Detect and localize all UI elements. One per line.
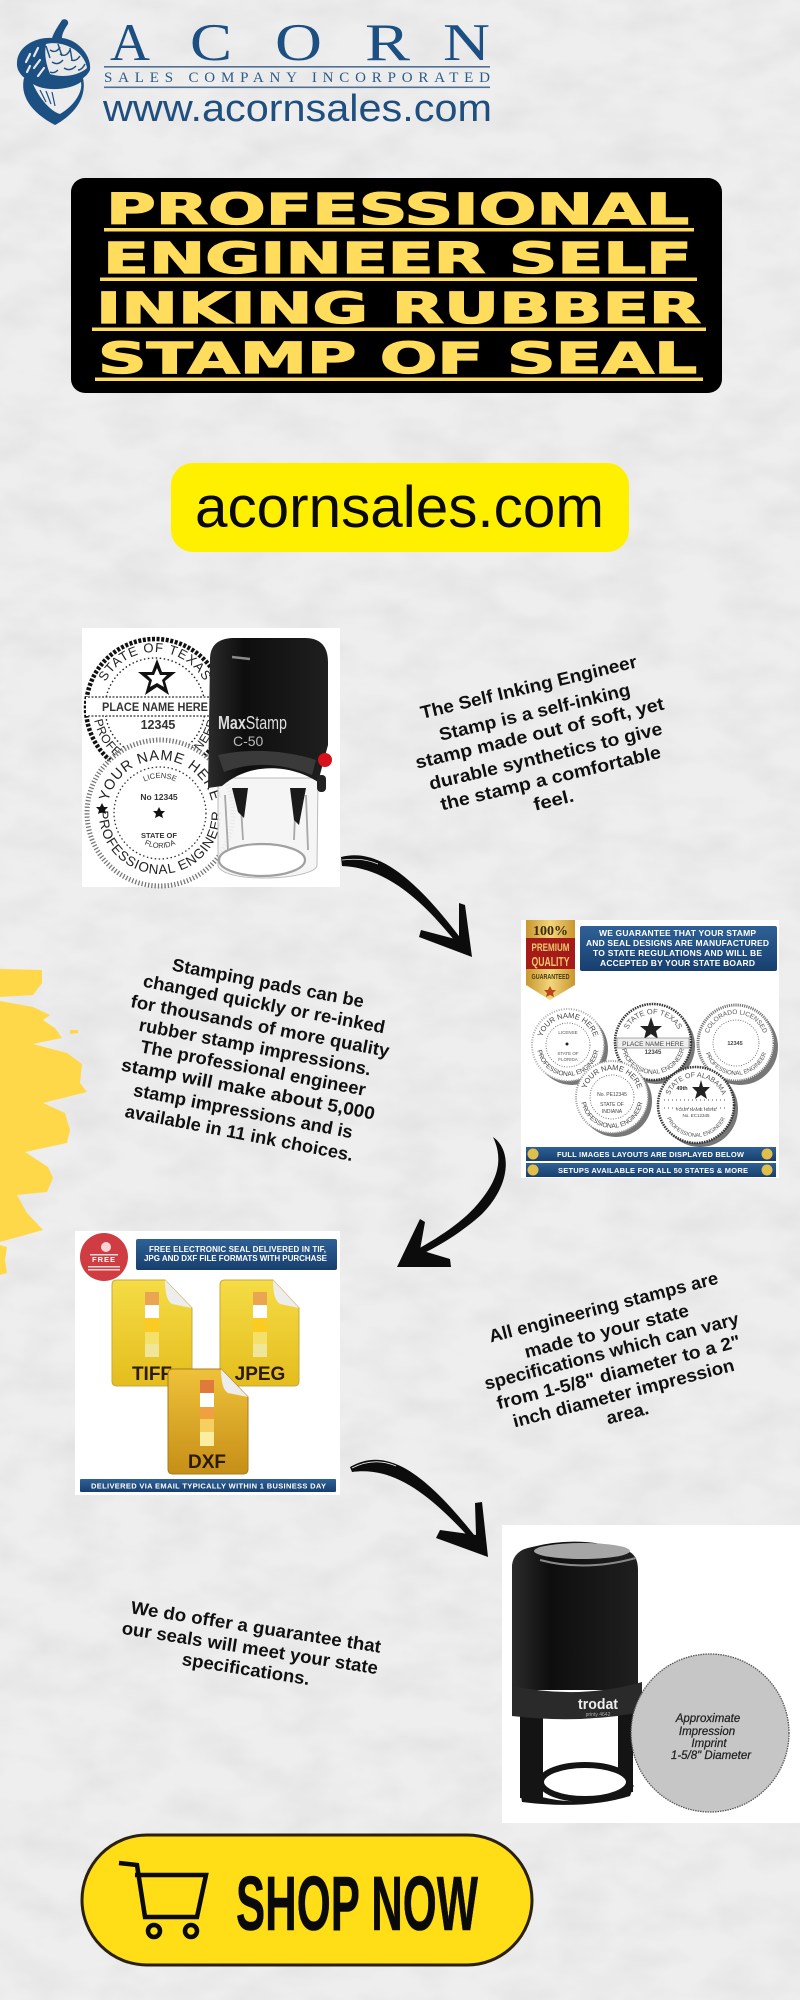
strip: delivered via email: DELIVERED VIA EMAIL TYPICALLY WITHIN 1 BUSINESS DAY <box>91 1482 326 1490</box>
text: self inking stamp description: stamp made out of soft, yet <box>413 694 666 773</box>
seal: Colorado design: PROFESSIONAL ENGINEER <box>706 1052 766 1075</box>
seal: Texas design: PROFESSIONAL ENGINEER <box>622 1048 684 1074</box>
title text <box>96 185 701 384</box>
text: self inking stamp description: the stamp a comfortable <box>438 742 663 814</box>
text: stamping pads description: rubber stamp impressions. <box>137 1015 373 1079</box>
logo url: www.acornsales.com <box>102 88 492 130</box>
image: free electronic seal files <box>75 1231 340 1495</box>
stamp: black body: C-50 <box>233 733 264 749</box>
seal: Colorado design <box>696 1004 778 1085</box>
badge: premium quality: PREMIUM <box>532 942 570 954</box>
badge: free <box>80 1233 128 1281</box>
seal: Alabama design <box>656 1066 738 1147</box>
icon: DXF file <box>168 1369 248 1474</box>
seal: Texas <box>84 636 210 762</box>
text: self inking stamp description: The Self Inking Engineer <box>418 652 639 723</box>
seal: Indiana design <box>575 1060 652 1137</box>
stamp: legs and base <box>520 1712 634 1805</box>
text: guarantee: our seals will meet your state <box>120 1618 379 1678</box>
seal: Florida: YOUR NAME HERE <box>98 750 221 800</box>
seal: Indiana design: INDIANA <box>602 1109 623 1115</box>
logo wordmark <box>110 14 490 72</box>
image: MaxStamp C-50 with seals <box>82 628 340 888</box>
strip: full images layouts: FULL IMAGES LAYOUTS ARE DISPLAYED BELOW <box>557 1150 745 1159</box>
impression circle: 1-5/8" Diameter <box>671 1750 752 1762</box>
strip: setups available: SETUPS AVAILABLE FOR ALL 50 STATES & MORE <box>558 1166 748 1175</box>
text: engineering stamp sizes <box>482 1268 743 1431</box>
button: shop now: SHOP NOW <box>236 1861 478 1947</box>
text: engineering stamp sizes: made to your state <box>522 1300 691 1362</box>
text: stamping pads description: for thousands of more quality <box>129 991 391 1061</box>
image: guarantee and seal designs <box>521 920 779 1178</box>
stamp: black body: MaxStamp <box>218 713 287 733</box>
text: stamping pads description <box>120 955 391 1165</box>
seal: Texas design <box>614 1002 695 1084</box>
badge: premium quality <box>526 920 575 1000</box>
arrow: second, pointing down-left <box>397 1137 506 1267</box>
text: stamping pads description: The professional engineer <box>139 1036 367 1100</box>
banner: free electronic seal <box>136 1239 337 1270</box>
icon: acorn <box>17 19 90 125</box>
icon: TIFF file <box>112 1280 192 1386</box>
icon: shopping cart <box>119 1863 206 1937</box>
arrow: third, pointing down-right <box>350 1460 488 1557</box>
badge: premium quality: GUARANTEED <box>532 972 570 981</box>
text: engineering stamp sizes: inch diameter impression <box>511 1355 736 1431</box>
seal: Indiana design: YOUR NAME HERE <box>582 1064 642 1089</box>
button: shop now <box>82 1835 532 1965</box>
text: engineering stamp sizes: from 1-5/8" diameter to a 2" <box>494 1331 743 1413</box>
impression circle: Impression <box>679 1726 735 1738</box>
stamp: clear base <box>218 778 318 878</box>
logo wordmark: R <box>365 14 411 72</box>
text: engineering stamp sizes: All engineering stamps are <box>487 1268 720 1346</box>
seal: Indiana design: STATE OF <box>600 1102 624 1108</box>
banner: guarantee: WE GUARANTEE THAT YOUR STAMP <box>599 928 756 938</box>
seal: Colorado design: COLORADO LICENSED <box>705 1010 767 1032</box>
stamp: body: printy 4642 <box>586 1712 611 1718</box>
seal: Florida design: YOUR NAME HERE <box>538 1012 598 1037</box>
icon: DXF file: DXF <box>188 1452 226 1473</box>
icon: TIFF file: TIFF <box>132 1364 172 1385</box>
seal: Alabama design: PROFESSIONAL ENGINEER <box>667 1116 725 1137</box>
text: self inking stamp description: durable synthetics to give <box>427 719 664 794</box>
seal: Alabama design: YOUR NAME HERE <box>675 1107 717 1112</box>
banner: guarantee: AND SEAL DESIGNS ARE MANUFACTURED <box>586 938 769 948</box>
stamp: body <box>512 1542 642 1719</box>
seal: Florida: STATE OF <box>141 831 177 840</box>
website pill: acornsales.com <box>195 475 604 540</box>
badge: free: FREE <box>92 1255 116 1264</box>
decoration: yellow brush stroke <box>0 969 87 1275</box>
text: stamping pads description: available in 11 ink choices. <box>123 1101 355 1165</box>
text: self inking stamp description: feel. <box>531 786 576 815</box>
title panel <box>71 178 722 393</box>
title text: STAMP OF SEAL <box>98 334 697 384</box>
title text: ENGINEER SELF <box>103 234 692 284</box>
seal: Texas: 12345 <box>141 718 175 732</box>
impression circle: Approximate <box>675 1713 740 1725</box>
text: engineering stamp sizes: area. <box>604 1398 651 1428</box>
text: stamping pads description: stamp will make about 5,000 <box>120 1055 377 1124</box>
badge: premium quality: 100% <box>533 924 568 939</box>
banner: guarantee: ACCEPTED BY YOUR STATE BOARD <box>600 958 755 968</box>
logo wordmark: C <box>190 14 232 72</box>
icon: JPEG file: JPEG <box>235 1364 285 1385</box>
text: guarantee: specifications. <box>181 1649 311 1689</box>
impression circle: Imprint <box>691 1738 727 1750</box>
impression circle <box>631 1654 789 1812</box>
seal: Colorado design: 12345 <box>727 1041 743 1047</box>
seal: Texas design: STATE OF TEXAS <box>624 1008 682 1029</box>
text: engineering stamp sizes: specifications which can vary <box>482 1309 741 1394</box>
logo wordmark: O <box>275 14 322 72</box>
badge: premium quality: QUALITY <box>532 954 570 969</box>
stamp: body: trodat <box>578 1696 618 1713</box>
title text: INKING RUBBER <box>96 284 701 334</box>
seal: Texas design: 12345 <box>645 1050 662 1056</box>
image: trodat stamp with impression size <box>502 1525 800 1823</box>
text: stamping pads description: changed quickly or re-inked <box>141 971 387 1037</box>
logo sub-line: SALES COMPANY INCORPORATED <box>104 70 490 86</box>
text: guarantee: We do offer a guarantee that <box>129 1597 382 1657</box>
seal: Florida: PROFESSIONAL ENGINEER <box>100 811 221 874</box>
banner: guarantee <box>580 926 777 971</box>
seal: Alabama design: 49th <box>676 1086 688 1092</box>
icon: JPEG file <box>220 1280 299 1386</box>
seal: Texas design: PLACE NAME HERE <box>622 1041 685 1048</box>
seal: Florida: LICENSE <box>143 772 177 782</box>
banner: free electronic seal: JPG AND DXF FILE FORMATS WITH PURCHASE <box>144 1254 328 1263</box>
website pill <box>171 463 629 552</box>
text: self inking stamp description: Stamp is a self-inking <box>437 680 632 745</box>
seal: Florida: No 12345 <box>140 792 178 802</box>
seal: Florida design <box>531 1008 608 1085</box>
logo: Acorn Sales Company <box>17 14 492 130</box>
strip: full images layouts <box>526 1147 776 1161</box>
seal: Florida <box>84 738 236 888</box>
arrow: first, pointing down-right <box>341 855 472 957</box>
logo wordmark: N <box>443 14 490 72</box>
text: self inking stamp description <box>413 652 666 815</box>
seal: Florida design: LICENSE <box>558 1030 578 1035</box>
text: stamping pads description: stamp impressions and is <box>132 1080 355 1142</box>
logo wordmark: A <box>110 14 150 72</box>
strip: setups available <box>526 1163 776 1177</box>
seal: Florida design: FLORIDA <box>558 1057 578 1062</box>
text: stamping pads description: Stamping pads can be <box>171 955 366 1012</box>
seal: Alabama design: No. EC12345 <box>682 1113 710 1118</box>
seal: Alabama design: STATE OF ALABAMA <box>666 1072 726 1096</box>
banner: guarantee: TO STATE REGULATIONS AND WILL BE <box>593 948 762 958</box>
stamp: black body <box>208 638 332 792</box>
banner: free electronic seal: FREE ELECTRONIC SEAL DELIVERED IN TIF, <box>149 1245 326 1254</box>
seal: Indiana design: No. PE12345 <box>597 1092 627 1098</box>
seal: Florida design: PROFESSIONAL ENGINEER <box>538 1050 598 1076</box>
text: guarantee <box>120 1597 382 1689</box>
seal: Texas: PROFESSIONAL ENGINEER <box>94 719 210 756</box>
seal: Indiana design: PROFESSIONAL ENGINEER <box>582 1102 642 1128</box>
seal: Florida: FLORIDA <box>144 840 176 848</box>
title text: PROFESSIONAL <box>106 185 689 235</box>
seal: Texas: STATE OF TEXAS <box>99 643 210 680</box>
strip: delivered via email <box>80 1479 336 1492</box>
seal: Texas: PLACE NAME HERE <box>102 702 208 714</box>
seal: Florida design: STATE OF <box>557 1051 579 1056</box>
